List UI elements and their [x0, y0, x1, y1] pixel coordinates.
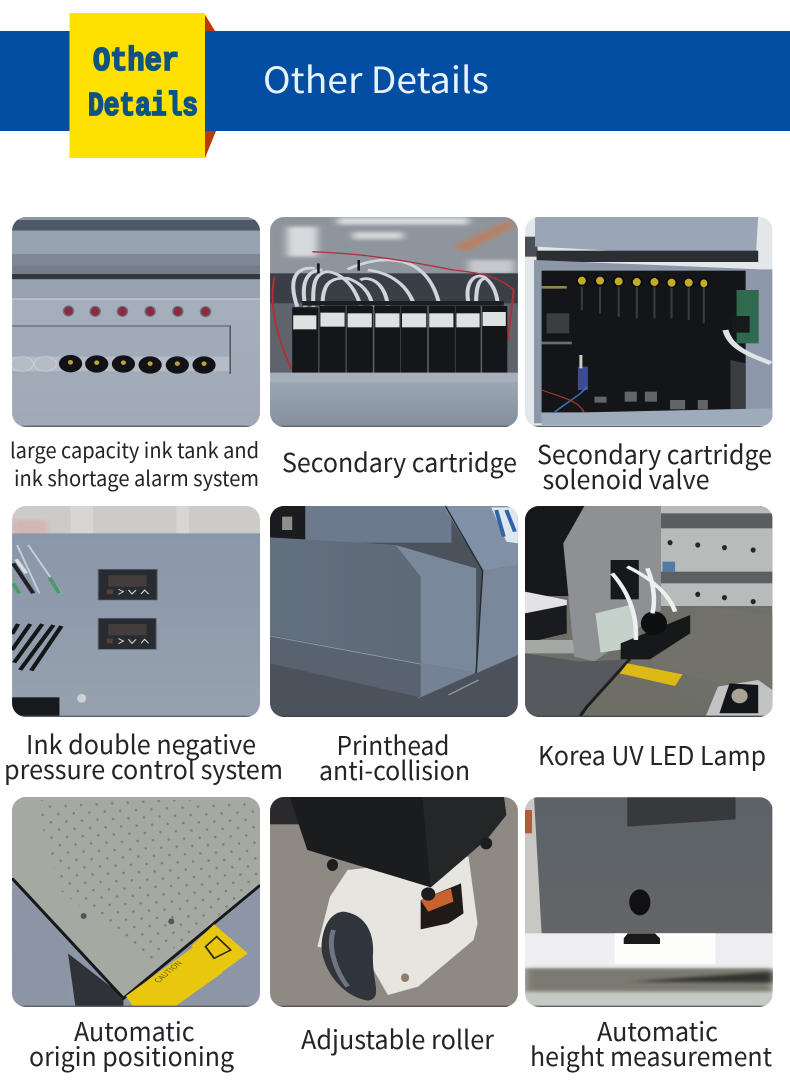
caption: height measurement: Automatic [597, 1012, 718, 1049]
panel: origin positioning photo [12, 796, 260, 1008]
caption: ink tank: ink shortage alarm system [14, 463, 259, 493]
caption: solenoid valve: Secondary cartridge [537, 435, 772, 472]
chamfer face [395, 545, 476, 673]
caption: origin positioning [29, 1012, 234, 1074]
blurred factory background [287, 217, 514, 273]
logo [491, 507, 518, 543]
badge text line 1: Other [93, 43, 179, 80]
panel: negative pressure control photo [12, 506, 260, 718]
caption: origin positioning: Automatic [74, 1012, 194, 1049]
sensor hole [629, 889, 650, 915]
warning sticker [620, 663, 683, 686]
white bracket [596, 605, 634, 653]
panel: ink tank photo [11, 216, 260, 428]
header banner [0, 13, 790, 158]
panel: adjustable roller photo [270, 796, 518, 1008]
temperature controller bottom [98, 618, 156, 649]
control board [737, 290, 759, 343]
bottom table [525, 653, 630, 717]
machine ledge [270, 373, 518, 382]
black machine corner [290, 796, 506, 887]
platform [772, 615, 773, 700]
white foot [317, 857, 478, 995]
solenoid valves row [577, 276, 708, 288]
caption: ink tank [10, 435, 259, 493]
blue solenoid and wire [578, 367, 588, 390]
screw [77, 694, 86, 703]
caption: UV lamp: Korea UV LED Lamp [538, 736, 766, 773]
right lower cover [476, 565, 518, 673]
panel: UV LED lamp photo [525, 506, 772, 718]
caption: solenoid valve: solenoid valve [542, 460, 710, 497]
upper vent [13, 545, 61, 593]
caption: origin positioning: origin positioning [29, 1037, 234, 1074]
carriage plate [563, 506, 661, 662]
wheel [321, 912, 376, 1001]
black cartridges [292, 306, 507, 373]
dark panel [627, 797, 736, 827]
blue band [0, 31, 790, 131]
panel: solenoid valve photo [525, 216, 772, 428]
caption: negative pressure: Ink double negative [26, 725, 256, 762]
ink window [11, 326, 230, 374]
dark lower rails [68, 953, 123, 1007]
temperature controller top [98, 569, 157, 600]
cartridge labels [293, 312, 506, 329]
title: Other Details [263, 52, 489, 104]
caution sticker: CAUTION [151, 959, 185, 985]
UV lamp [621, 615, 690, 659]
caption: height measurement [530, 1012, 772, 1074]
caption: negative pressure: pressure control system [4, 750, 283, 787]
left black mechanism [525, 506, 585, 596]
cover main face [270, 537, 421, 663]
panel: secondary cartridge photo [270, 216, 518, 428]
bottom right block [705, 680, 772, 717]
caption: printhead: anti-collision [319, 751, 470, 788]
caption: solenoid valve [537, 435, 772, 497]
light gap [525, 933, 772, 968]
caption: ink tank: large capacity ink tank and [10, 435, 259, 465]
caption: printhead: Printhead [336, 726, 450, 763]
lower vent [12, 624, 61, 671]
open lid [535, 217, 758, 251]
height sensor foot [624, 933, 660, 944]
caption: negative pressure [4, 725, 283, 787]
tray slots [594, 392, 708, 409]
machine body [534, 797, 772, 933]
white tubes [612, 567, 675, 640]
ink tubes [293, 260, 498, 307]
caption: printhead [319, 726, 470, 788]
panel: height measurement photo [525, 796, 772, 1008]
panel: printhead anti-collision photo [270, 506, 518, 718]
caution sticker [126, 924, 248, 1007]
ink shortage indicator lights [63, 306, 211, 317]
caption: roller: Adjustable roller [301, 1020, 495, 1057]
perforated plate [12, 796, 260, 998]
ink connectors [59, 355, 216, 374]
blurred table edge [525, 968, 772, 992]
right upper cover [443, 506, 518, 571]
ribbon folds [204, 13, 216, 158]
caption: height measurement: height measurement [530, 1037, 772, 1074]
caption: secondary cartridge: Secondary cartridge [282, 443, 517, 480]
yellow badge [70, 13, 205, 158]
cabinet frame [534, 260, 772, 423]
rails background [657, 506, 772, 606]
badge text line 2: Details [88, 88, 198, 125]
orange adjuster [421, 883, 463, 929]
dark interior [542, 271, 746, 412]
lower band [270, 636, 421, 697]
